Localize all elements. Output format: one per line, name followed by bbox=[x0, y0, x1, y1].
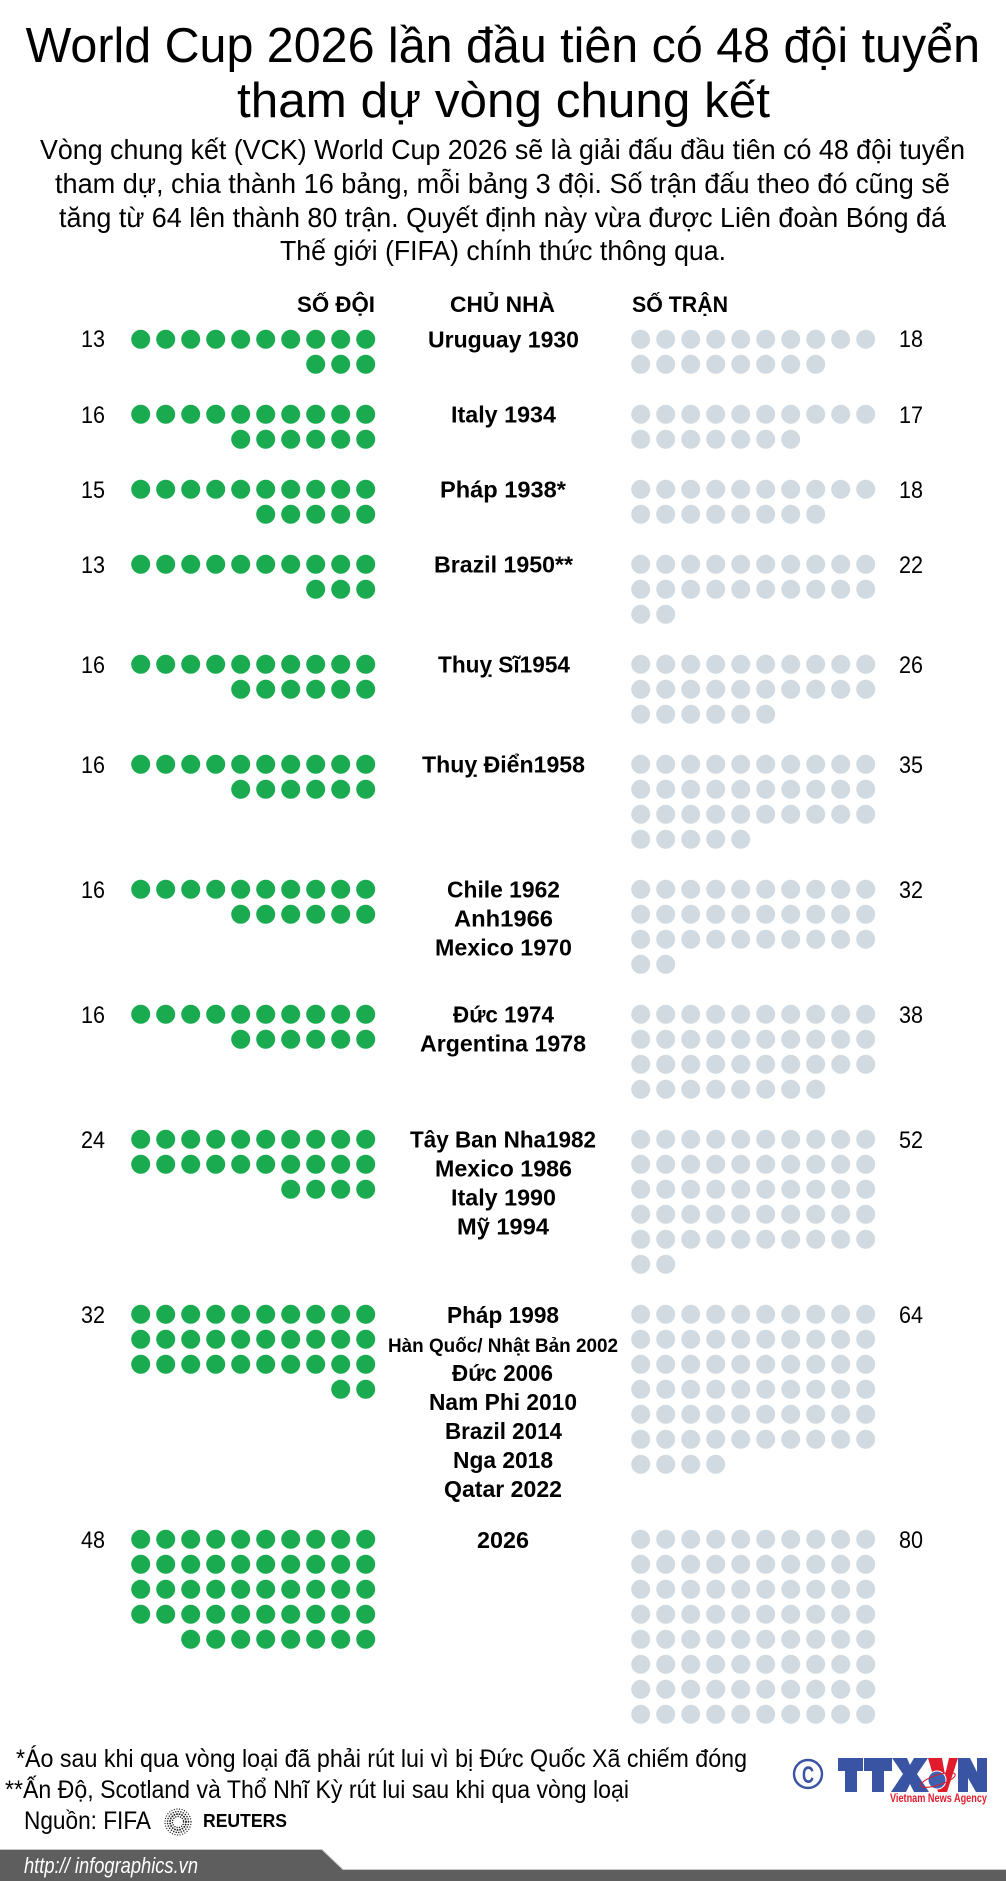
host: Uruguay 1930 bbox=[428, 326, 579, 352]
row: Pháp 1938 bbox=[81, 476, 923, 514]
host: Pháp 1938* bbox=[440, 476, 567, 502]
host: Brazil 1950** bbox=[434, 552, 574, 578]
icon: copyright bbox=[794, 1760, 822, 1789]
dots: 22 matches bbox=[641, 564, 866, 614]
row: Thuỵ Sĩ 1954: 16 bbox=[81, 652, 105, 679]
dots: 64 matches bbox=[641, 1314, 866, 1464]
V letter bbox=[928, 1758, 958, 1792]
dots: 16 teams bbox=[141, 889, 366, 914]
row: Pháp 1938: 15 bbox=[81, 477, 105, 504]
icon: Reuters dotted circle bbox=[165, 1809, 191, 1835]
row: Pháp 1998 to Qatar 2022: 32 bbox=[81, 1302, 105, 1329]
hosts: Tây Ban Nha1982 bbox=[410, 1126, 596, 1152]
hosts: Hàn Quốc/ Nhật Bản 2002 bbox=[388, 1336, 618, 1357]
hosts: Đức 2006 bbox=[452, 1360, 553, 1386]
row: Chile 1962, Anh 1966, Mexico 1970 bbox=[81, 876, 923, 964]
hosts: Đức 1974 bbox=[453, 1002, 554, 1028]
row: Chile 1962, Anh 1966, Mexico 1970: 32 bbox=[899, 877, 923, 904]
footnotes: *Áo sau khi qua vòng loại đã phải rút lui vì bị Đức Quốc Xã chiếm đóng bbox=[16, 1744, 747, 1773]
dots: 24 teams bbox=[141, 1139, 366, 1189]
dots: 35 matches bbox=[641, 764, 866, 839]
hosts: Brazil 2014 bbox=[445, 1418, 562, 1444]
host: Thuỵ Sĩ1954 bbox=[438, 652, 570, 678]
row: Uruguay 1930 bbox=[81, 326, 923, 364]
Reuters wordmark: REUTERS bbox=[203, 1811, 287, 1831]
row: Italy 1934 bbox=[81, 402, 923, 439]
logo: TTXVN bbox=[794, 1758, 987, 1805]
hosts: Mexico 1986 bbox=[435, 1156, 572, 1182]
hosts: Qatar 2022 bbox=[444, 1476, 562, 1502]
hosts bbox=[435, 876, 572, 960]
row: Chile 1962, Anh 1966, Mexico 1970: 16 bbox=[81, 877, 105, 904]
intro paragraph: tăng từ 64 lên thành 80 trận. Quyết định này vừa được Liên đoàn Bóng đá bbox=[59, 202, 947, 233]
hosts bbox=[410, 1126, 596, 1240]
hosts: Italy 1990 bbox=[451, 1184, 556, 1210]
footer bar bbox=[0, 1850, 1006, 1881]
dots: 18 matches bbox=[641, 339, 866, 364]
source: Nguồn: FIFA bbox=[24, 1807, 151, 1835]
title bbox=[26, 19, 980, 128]
dots: 26 matches bbox=[641, 664, 866, 714]
column headers: CHỦ NHÀ bbox=[450, 292, 555, 317]
intro paragraph: Vòng chung kết (VCK) World Cup 2026 sẽ là giải đấu đầu tiên có 48 đội tuyển bbox=[40, 134, 965, 165]
dots: 16 teams bbox=[141, 664, 366, 689]
hosts: Argentina 1978 bbox=[420, 1030, 586, 1056]
hosts: Mexico 1970 bbox=[435, 934, 572, 960]
footer url: http:// infographics.vn bbox=[24, 1853, 198, 1878]
title: tham dự vòng chung kết bbox=[237, 74, 770, 128]
row: Tây Ban Nha 1982 to Mỹ 1994 bbox=[81, 1126, 923, 1264]
row: Đức 1974, Argentina 1978 bbox=[81, 1002, 923, 1089]
dots: 80 matches bbox=[641, 1539, 866, 1714]
row: 2026: 80 bbox=[899, 1527, 923, 1554]
dots: 15 teams bbox=[141, 489, 366, 514]
row: Italy 1934: 17 bbox=[899, 402, 923, 429]
row: Brazil 1950 bbox=[81, 552, 923, 614]
row: Tây Ban Nha 1982 to Mỹ 1994: 24 bbox=[81, 1127, 105, 1154]
column headers bbox=[297, 291, 728, 317]
host: Thuỵ Điển1958 bbox=[422, 752, 585, 778]
row: Thuỵ Sĩ 1954 bbox=[81, 652, 923, 714]
dots: 32 matches bbox=[641, 889, 866, 964]
host: 2026 bbox=[477, 1527, 529, 1553]
dots: 13 teams bbox=[141, 339, 366, 364]
row: Brazil 1950: 13 bbox=[81, 552, 105, 579]
footnotes bbox=[5, 1744, 747, 1804]
row: Pháp 1938: 18 bbox=[899, 477, 923, 504]
row: Thuỵ Điển 1958: 35 bbox=[899, 752, 923, 779]
row: Thuỵ Điển 1958 bbox=[81, 752, 923, 839]
row: 2026 bbox=[81, 1527, 923, 1714]
icon: globe bbox=[919, 1770, 957, 1790]
TTX letters bbox=[838, 1758, 929, 1792]
column headers: SỐ TRẬN bbox=[632, 291, 728, 317]
dots: 16 teams bbox=[141, 414, 366, 439]
title: World Cup 2026 lần đầu tiên có 48 đội tuyển bbox=[26, 19, 980, 73]
hosts: Anh1966 bbox=[454, 906, 553, 932]
row: Thuỵ Sĩ 1954: 26 bbox=[899, 652, 923, 679]
hosts: Mỹ 1994 bbox=[457, 1214, 549, 1240]
N letter bbox=[958, 1758, 987, 1792]
hosts bbox=[420, 1002, 586, 1056]
dots: 52 matches bbox=[641, 1139, 866, 1264]
row: Uruguay 1930: 18 bbox=[899, 326, 923, 353]
dots: 16 teams bbox=[141, 764, 366, 789]
row: Brazil 1950: 22 bbox=[899, 552, 923, 579]
hosts: Chile 1962 bbox=[447, 876, 560, 902]
dots: 16 teams bbox=[141, 1014, 366, 1039]
dots: 32 teams bbox=[141, 1314, 366, 1389]
row: Đức 1974, Argentina 1978: 38 bbox=[899, 1002, 923, 1029]
dots: 18 matches bbox=[641, 489, 866, 514]
column headers: SỐ ĐỘI bbox=[297, 291, 375, 317]
intro paragraph: Thế giới (FIFA) chính thức thông qua. bbox=[280, 235, 726, 266]
row: Pháp 1998 to Qatar 2022 bbox=[81, 1302, 923, 1502]
row: Thuỵ Điển 1958: 16 bbox=[81, 752, 105, 779]
row: Uruguay 1930: 13 bbox=[81, 326, 105, 353]
dots: 48 teams bbox=[141, 1539, 366, 1639]
dots: 13 teams bbox=[141, 564, 366, 589]
row: Tây Ban Nha 1982 to Mỹ 1994: 52 bbox=[899, 1127, 923, 1154]
row: 2026: 48 bbox=[81, 1527, 105, 1554]
row: Đức 1974, Argentina 1978: 16 bbox=[81, 1002, 105, 1029]
hosts bbox=[388, 1302, 618, 1502]
dots: 17 matches bbox=[641, 414, 866, 439]
hosts: Nam Phi 2010 bbox=[429, 1389, 577, 1415]
intro paragraph: tham dự, chia thành 16 bảng, mỗi bảng 3 đội. Số trận đấu theo đó cũng sẽ bbox=[55, 168, 950, 199]
icon: copyright: C bbox=[802, 1762, 814, 1789]
footnotes: **Ấn Độ, Scotland và Thổ Nhĩ Kỳ rút lui sau khi qua vòng loại bbox=[5, 1775, 629, 1804]
row: Pháp 1998 to Qatar 2022: 64 bbox=[899, 1302, 923, 1329]
hosts: Pháp 1998 bbox=[447, 1302, 559, 1328]
intro paragraph bbox=[40, 134, 965, 266]
row: Italy 1934: 16 bbox=[81, 402, 105, 429]
dots: 38 matches bbox=[641, 1014, 866, 1089]
hosts: Nga 2018 bbox=[453, 1447, 553, 1473]
host: Italy 1934 bbox=[451, 402, 556, 428]
